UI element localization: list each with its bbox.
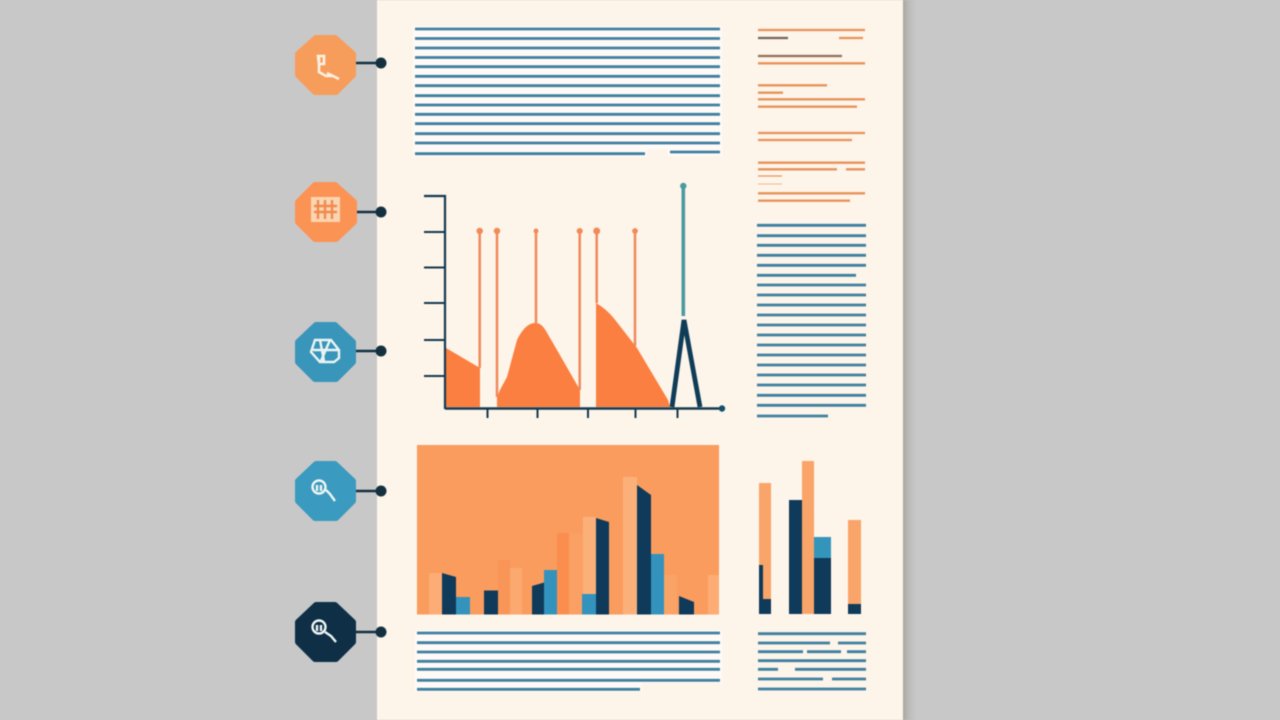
deeper orange bars — [498, 533, 569, 614]
icon: magnifier — [312, 620, 336, 642]
orange areas — [446, 303, 670, 407]
bar chart: right small chart — [759, 461, 861, 614]
orange bars — [759, 461, 861, 614]
teal highlight line — [680, 183, 686, 316]
text block: top main lines — [413, 26, 722, 157]
blue bars — [456, 554, 664, 614]
pale background bars — [429, 477, 719, 614]
icon: magnifier — [312, 480, 335, 501]
icon: globe search — [311, 340, 339, 362]
axis end dot — [719, 405, 725, 412]
text block: top right orange lines — [758, 30, 865, 201]
axes and ticks — [424, 196, 722, 418]
icon: angled glyph — [318, 56, 339, 79]
blue bar cap — [814, 537, 831, 558]
dark peak — [672, 320, 700, 407]
marker 5: navy icon with connector — [298, 605, 386, 659]
marker 1: orange icon with connector — [298, 38, 386, 92]
marker 2: orange icon with connector — [298, 185, 386, 239]
text block: bottom right lines — [758, 634, 866, 689]
text block: middle right lines — [757, 225, 866, 416]
marker 3: blue icon with connector — [298, 325, 386, 379]
marker 4: blue icon with connector — [298, 464, 386, 518]
area chart — [424, 183, 725, 418]
orange drop lines — [478, 229, 637, 397]
navy bars — [759, 500, 861, 614]
panel: report page — [377, 0, 903, 720]
icon: table grid — [311, 197, 340, 222]
navy bars — [442, 485, 694, 614]
text block: bottom main lines — [415, 630, 722, 692]
bar chart: orange panel — [417, 445, 719, 614]
